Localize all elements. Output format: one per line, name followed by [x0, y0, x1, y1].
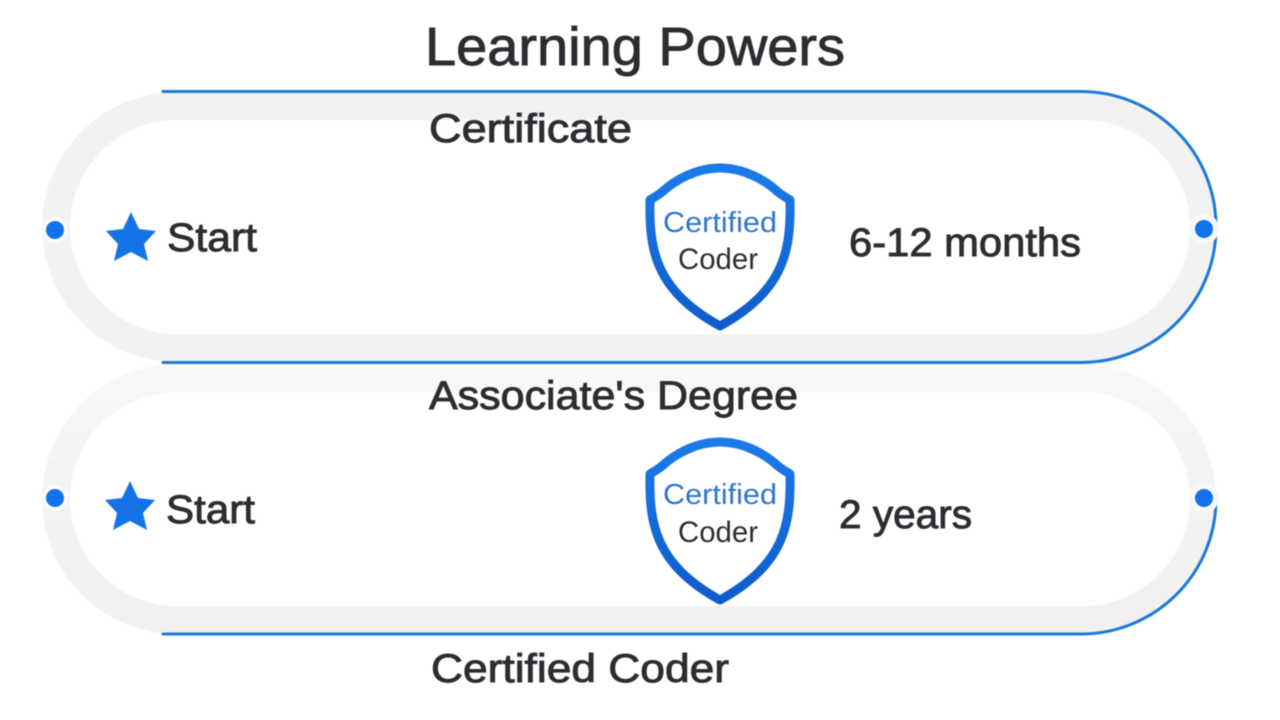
icon: certified coder shield: Coder	[678, 243, 758, 276]
node: left	[42, 217, 68, 243]
node: left	[42, 485, 68, 511]
node: right	[1189, 483, 1219, 513]
panel: associate's degree pathway	[42, 364, 1219, 634]
heading: associate's degree: Associate's Degree	[429, 374, 798, 418]
icon: certified coder shield: Certified	[663, 479, 777, 511]
icon: star	[106, 212, 156, 261]
label: start: Start	[167, 216, 257, 260]
footer label: certified coder: Certified Coder	[431, 647, 729, 691]
pill track: associate's degree	[42, 364, 1216, 634]
icon: certified coder shield	[650, 442, 790, 600]
heading: certificate: Certificate	[429, 107, 632, 151]
node: right	[1189, 214, 1219, 244]
label: start: Start	[166, 488, 255, 532]
duration: 6-12 months: 6-12 months	[849, 221, 1081, 265]
outline arc: certificate	[163, 92, 1216, 362]
icon: certified coder shield: Certified	[663, 207, 777, 239]
duration: 2 years: 2 years	[839, 493, 972, 537]
icon: certified coder shield: Coder	[678, 516, 758, 549]
icon: star	[105, 481, 155, 530]
icon: certified coder shield	[650, 168, 790, 326]
panel: certificate pathway	[42, 92, 1219, 362]
outline arc: associate's degree	[163, 500, 1216, 634]
pill track: certificate	[42, 92, 1216, 362]
title: Learning Powers	[425, 17, 845, 77]
